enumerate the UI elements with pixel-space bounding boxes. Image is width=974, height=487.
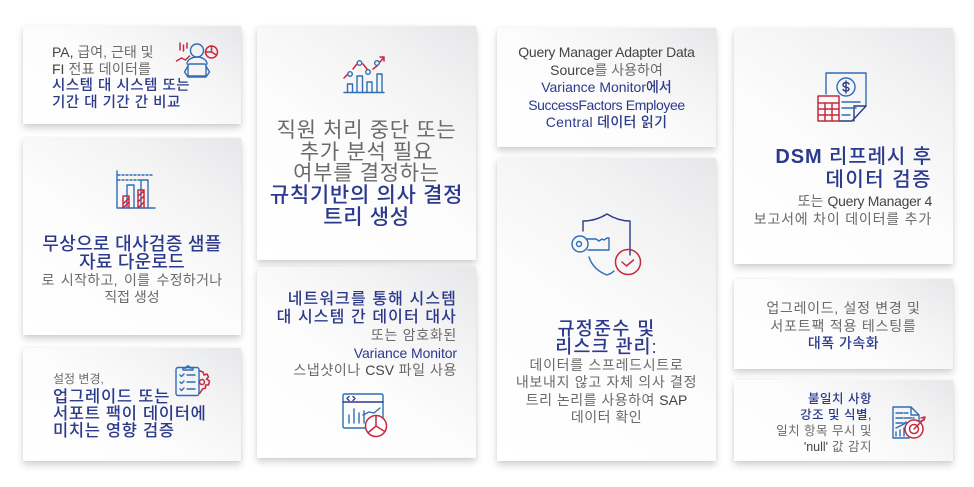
text: system comparison: FI 전표 데이터를 xyxy=(52,61,151,77)
text: DSM refresh xyxy=(754,146,932,227)
text: compliance and risk: 트리 논리를 사용하여 SAP xyxy=(526,392,687,408)
panel: sample download xyxy=(23,138,241,335)
text: query manager adapter: SuccessFactors Employee xyxy=(528,96,685,112)
text: testing acceleration xyxy=(766,300,921,351)
panel: system to system reconciliation xyxy=(257,267,476,458)
text: decision tree: 직원 처리 중단 또는 xyxy=(277,119,456,142)
panel: system comparison xyxy=(23,26,241,124)
text: system to system reconciliation: 대 시스템 간 데이터 대사 xyxy=(277,309,457,326)
text: testing acceleration: 업그레이드, 설정 변경 및 xyxy=(766,300,921,316)
icon: invoice with calculator xyxy=(817,72,867,122)
text: DSM refresh: 보고서에 차이 데이터를 추가 xyxy=(754,211,932,227)
text: query manager adapter: Source를 사용하여 xyxy=(550,62,663,78)
text: impact validation: 서포트 팩이 데이터에 xyxy=(53,405,206,423)
text: testing acceleration: 서포트팩 적용 테스팅를 xyxy=(770,318,917,334)
text: query manager adapter: Variance Monitor에서 xyxy=(541,79,672,95)
text: impact validation: 설정 변경, xyxy=(53,372,104,386)
text: decision tree: 여부를 결정하는 xyxy=(293,162,440,185)
text: decision tree: 트리 생성 xyxy=(323,206,410,229)
text: compliance and risk: 데이터를 스프레드시트로 xyxy=(530,357,683,373)
text: sample download: 무상으로 대사검증 샘플 xyxy=(42,234,222,254)
text: DSM refresh: 데이터 검증 xyxy=(825,169,932,191)
text: system comparison: PA, 급여, 근태 및 xyxy=(52,44,154,60)
panel: mismatch identification xyxy=(734,380,953,461)
text: decision tree xyxy=(270,119,463,229)
text: system comparison xyxy=(52,44,190,111)
text: decision tree: 추가 분석 필요 xyxy=(300,141,433,164)
text: impact validation xyxy=(53,372,206,440)
text: query manager adapter xyxy=(518,44,695,130)
panel: impact validation xyxy=(23,348,241,461)
icon: trend line above bars xyxy=(343,56,385,94)
icon: clipboard with gear xyxy=(175,365,210,396)
text: sample download: 자료 다운로드 xyxy=(79,252,185,272)
text: impact validation: 업그레이드 또는 xyxy=(53,388,170,406)
text: system to system reconciliation: Variance Monitor xyxy=(354,344,457,360)
text: system comparison: 기간 대 기간 간 비교 xyxy=(52,95,181,111)
text: compliance and risk xyxy=(516,318,697,425)
text: sample download: 로 시작하고, 이를 수정하거나 xyxy=(42,272,222,288)
panel: compliance and risk xyxy=(497,158,716,461)
text: DSM refresh: 또는 Query Manager 4 xyxy=(798,193,932,209)
text: compliance and risk: 데이터 확인 xyxy=(571,409,642,425)
text: system to system reconciliation: 스냅샷이나 CSV 파일 사용 xyxy=(293,362,457,378)
icon: code window with chart and pie xyxy=(342,393,388,438)
text: testing acceleration: 대폭 가속화 xyxy=(808,335,879,351)
text: compliance and risk: 규정준수 및 xyxy=(557,318,656,339)
text: mismatch identification: 강조 및 식별, xyxy=(800,408,872,422)
text: impact validation: 미치는 영향 검증 xyxy=(53,422,175,440)
panel: DSM refresh xyxy=(734,28,953,264)
panel: testing acceleration xyxy=(734,279,953,369)
text: query manager adapter: Query Manager Adapter Data xyxy=(518,44,695,60)
text: mismatch identification: 일치 항목 무시 및 xyxy=(776,424,872,438)
text: sample download xyxy=(42,234,222,305)
text: query manager adapter: Central 데이터 읽기 xyxy=(546,114,667,130)
panel: query manager adapter xyxy=(497,28,716,147)
text: DSM refresh: DSM 리프레시 후 xyxy=(775,146,932,168)
text: compliance and risk: 리스크 관리: xyxy=(555,336,658,357)
text: mismatch identification xyxy=(776,392,872,454)
text: mismatch identification: 불일치 사항 xyxy=(808,392,872,406)
text: system to system reconciliation: 네트워크를 통해 시스템 xyxy=(288,291,457,308)
text: system to system reconciliation xyxy=(277,290,457,378)
text: sample download: 직접 생성 xyxy=(104,289,160,305)
icon: shield with key and check xyxy=(571,213,642,276)
text: system comparison: 시스템 대 시스템 또는 xyxy=(52,78,190,94)
text: decision tree: 규칙기반의 의사 결정 xyxy=(270,184,463,207)
text: mismatch identification: 'null' 값 감지 xyxy=(804,440,872,454)
text: system to system reconciliation: 또는 암호화된 xyxy=(371,327,457,343)
panel: decision tree xyxy=(257,26,476,260)
icon: report with target xyxy=(892,406,926,439)
icon: analyst with laptop xyxy=(176,42,218,78)
icon: bar chart with hatched bars xyxy=(116,170,156,209)
text: compliance and risk: 내보내지 않고 자체 의사 결정 xyxy=(516,374,697,390)
